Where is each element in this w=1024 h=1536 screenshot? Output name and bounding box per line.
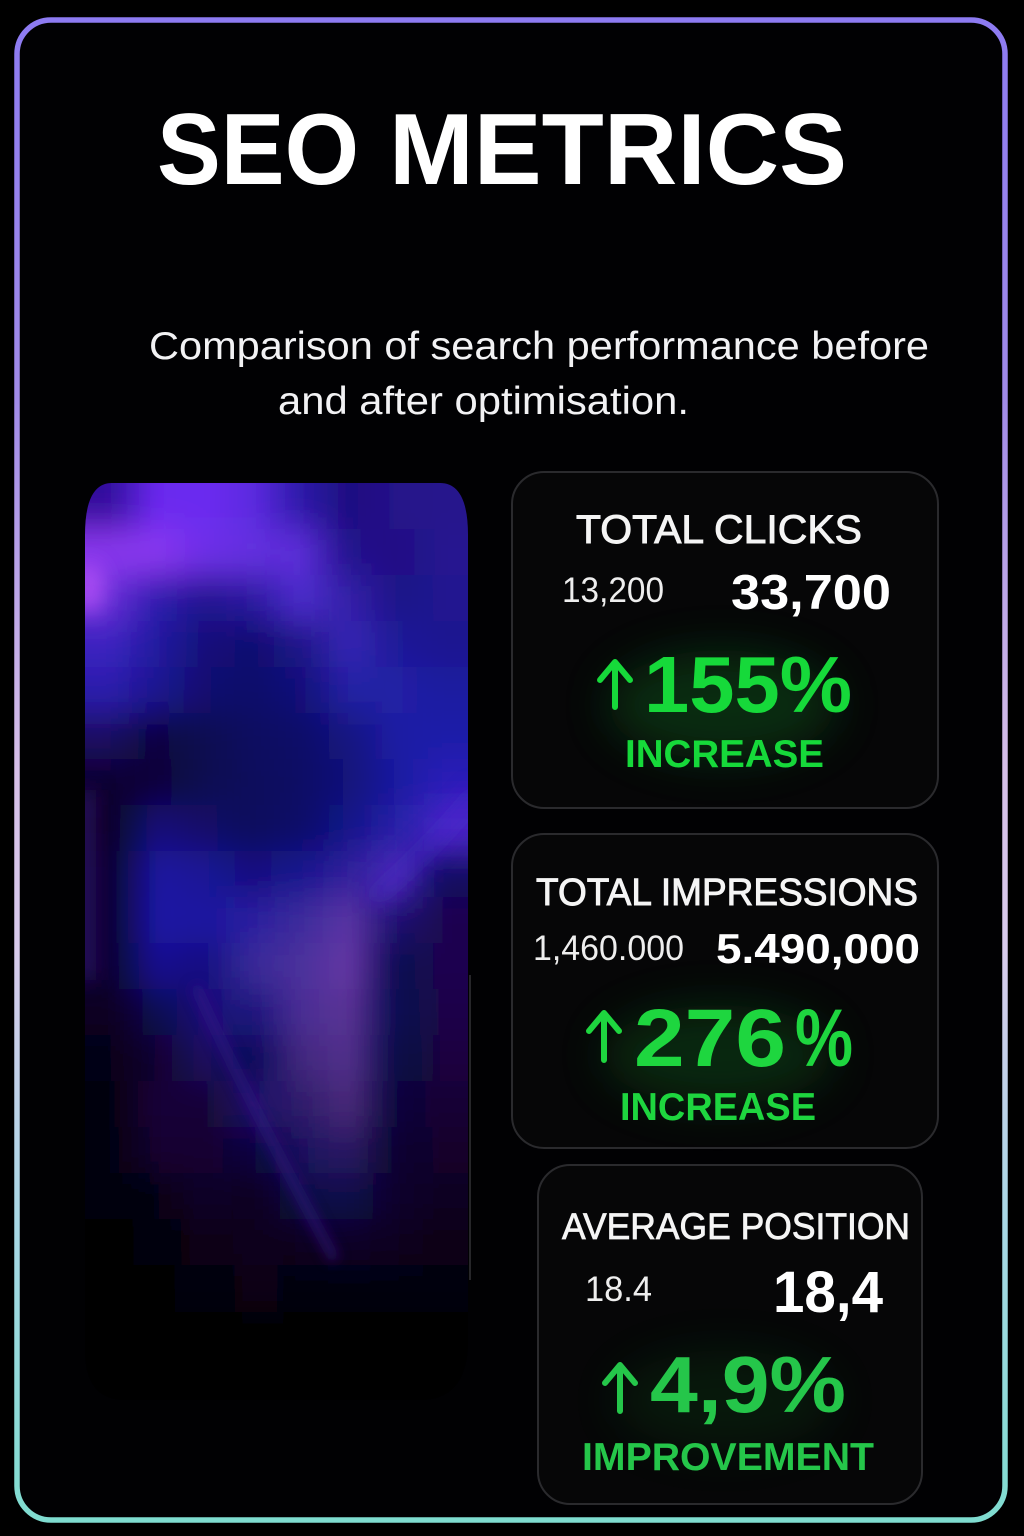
percent change: 4,9% [650, 1340, 846, 1429]
card: total impressions [512, 834, 938, 1148]
subtitle: Comparison of search performance before [149, 325, 929, 368]
abstract gradient panel [85, 483, 468, 1312]
icon: up arrow [589, 1013, 619, 1060]
after value: 18,4 [773, 1260, 883, 1325]
before value: 18.4 [585, 1270, 652, 1309]
title: METRICS [389, 94, 847, 206]
subtitle: and after optimisation. [278, 380, 689, 423]
metric heading: TOTAL IMPRESSIONS [536, 872, 918, 914]
glow behind metric [615, 1350, 835, 1450]
title [157, 94, 847, 206]
after value: 33,700 [731, 566, 891, 620]
after value: 5.490,000 [716, 925, 920, 972]
light streak [195, 985, 335, 1260]
subtitle [149, 325, 929, 423]
icon: up arrow [605, 1365, 635, 1411]
card: average position [538, 1165, 922, 1504]
percent change [634, 993, 853, 1084]
before value: 1,460.000 [533, 929, 684, 968]
percent change: 276 [634, 993, 786, 1084]
change label: INCREASE [625, 733, 824, 776]
card: total clicks [512, 472, 938, 808]
glow behind metric [607, 650, 837, 760]
glow behind metric [603, 1005, 833, 1105]
metric heading: TOTAL CLICKS [576, 508, 862, 552]
hot spot and edge tints [85, 558, 440, 988]
title: SEO [157, 94, 359, 206]
percent change: % [795, 993, 853, 1084]
before value: 13,200 [562, 571, 664, 610]
panel edge highlight [469, 975, 471, 1280]
metric heading: AVERAGE POSITION [562, 1206, 910, 1247]
icon: up arrow [600, 662, 630, 707]
change label: IMPROVEMENT [582, 1436, 874, 1479]
percent change: 155% [644, 640, 852, 729]
change label: INCREASE [620, 1086, 816, 1129]
